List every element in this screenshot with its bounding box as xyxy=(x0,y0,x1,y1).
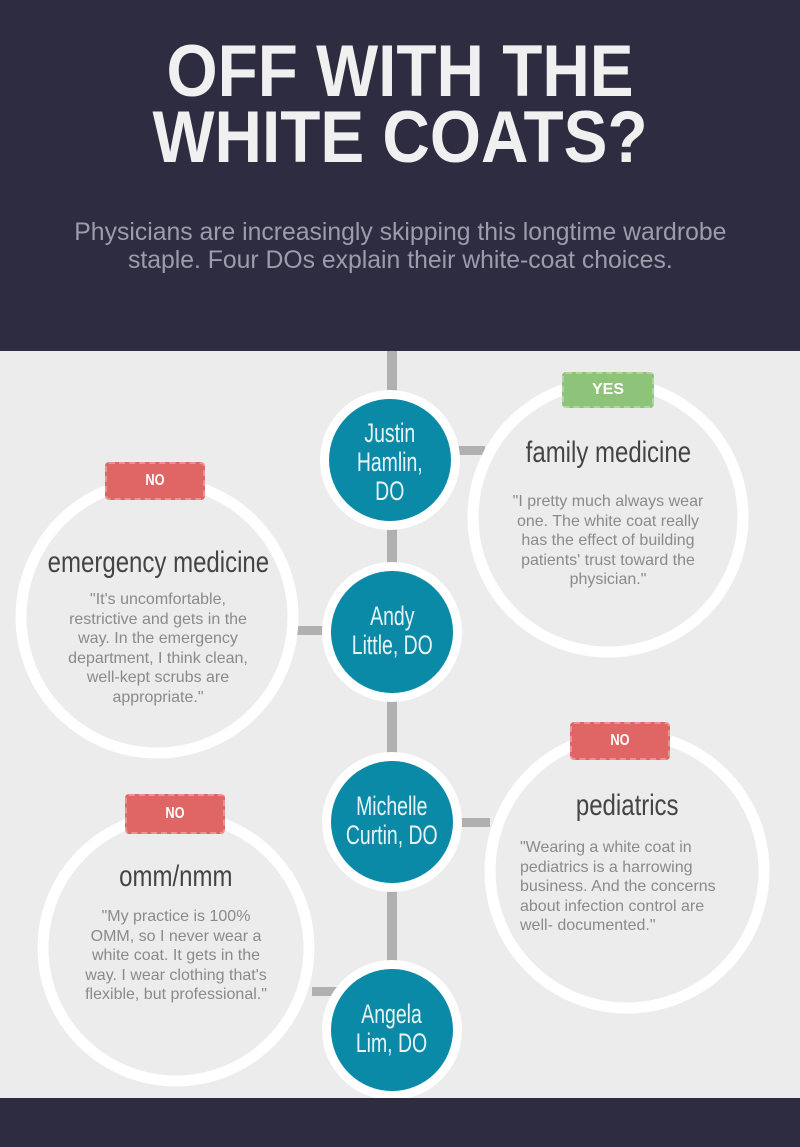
title xyxy=(152,31,648,178)
name: Andy Little xyxy=(351,601,433,660)
quote: appropriate." xyxy=(112,689,204,706)
quote: white coat. It gets in the xyxy=(92,947,260,964)
quote xyxy=(68,591,248,706)
badge: no emergency: NO xyxy=(145,472,165,489)
header panel xyxy=(0,0,800,351)
quote xyxy=(520,839,716,934)
footer band xyxy=(0,1098,800,1147)
quote: way. In the emergency xyxy=(78,630,238,647)
badge: no omm xyxy=(125,794,225,834)
subtitle: staple. Four DOs explain their white-coat choices. xyxy=(128,246,672,274)
quote: physician." xyxy=(570,571,646,588)
quote: way. I wear clothing that's xyxy=(85,967,267,984)
badge: no pediatrics xyxy=(570,722,670,760)
quote: "It's uncomfortable, xyxy=(90,591,226,608)
quote: department, I think clean, xyxy=(68,650,248,667)
badge: no emergency xyxy=(105,462,205,500)
name: Justin Hamlin: Justin xyxy=(365,418,415,448)
quote: well- documented." xyxy=(520,917,656,934)
name: Angela Lim: Lim, DO xyxy=(356,1028,428,1058)
name: Justin Hamlin xyxy=(357,418,423,506)
quote: pediatrics is a harrowing xyxy=(520,859,693,876)
badge: yes family: YES xyxy=(592,381,624,398)
subtitle: Physicians are increasingly skipping this longtime wardrobe xyxy=(74,218,726,246)
quote: OMM, so I never wear a xyxy=(91,928,261,945)
panel: emergency medicine xyxy=(47,546,269,706)
quote: well-kept scrubs are xyxy=(87,669,229,686)
quote xyxy=(513,493,704,588)
quote: business. And the concerns xyxy=(520,878,716,895)
panel: family medicine xyxy=(513,436,704,588)
heading: omm/nmm xyxy=(119,860,233,893)
name: Angela Lim: Angela xyxy=(362,999,422,1029)
quote: "I pretty much always wear xyxy=(513,493,703,510)
badge: no omm: NO xyxy=(165,805,185,822)
title: WHITE COATS? xyxy=(152,97,648,178)
title: OFF WITH THE xyxy=(166,31,634,112)
heading: family medicine xyxy=(525,436,691,469)
quote: about infection control are xyxy=(520,898,704,915)
name: Andy Little: Andy xyxy=(370,601,414,631)
badge: no pediatrics: NO xyxy=(610,732,630,749)
subtitle xyxy=(74,218,726,274)
quote: has the effect of building xyxy=(521,532,695,549)
name: Justin Hamlin: DO xyxy=(375,476,405,506)
badge: yes family xyxy=(562,372,654,408)
name: Michelle Curtin: Curtin, DO xyxy=(346,820,438,850)
name: Michelle Curtin xyxy=(346,791,438,850)
name: Michelle Curtin: Michelle xyxy=(356,791,428,821)
quote: one. The white coat really xyxy=(517,513,699,530)
name: Angela Lim xyxy=(356,999,428,1058)
panel: pediatrics xyxy=(520,789,716,934)
quote: patients' trust toward the xyxy=(521,552,695,569)
name: Andy Little: Little, DO xyxy=(351,630,433,660)
quote: flexible, but professional." xyxy=(85,986,267,1003)
quote: "Wearing a white coat in xyxy=(520,839,692,856)
quote: "My practice is 100% xyxy=(102,908,250,925)
panel: omm/nmm xyxy=(85,860,267,1003)
quote: restrictive and gets in the xyxy=(69,611,247,628)
name: Justin Hamlin: Hamlin, xyxy=(357,447,423,477)
heading: emergency medicine xyxy=(47,546,269,579)
heading: pediatrics xyxy=(576,789,678,822)
quote xyxy=(85,908,267,1003)
